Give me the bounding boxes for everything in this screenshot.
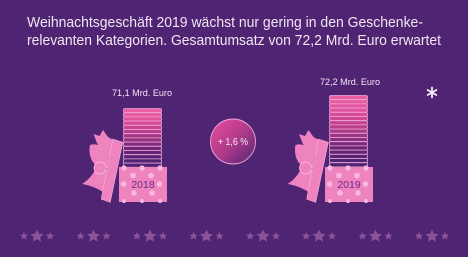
row of stars (20, 230, 449, 242)
year 2018: 2018 (131, 179, 155, 191)
bow and lid 2019 (288, 130, 328, 202)
label: 72,2 Mrd. Euro: 72,2 Mrd. Euro (320, 77, 380, 87)
gift 2018 (82, 108, 167, 203)
stack of coins 2018 (124, 108, 162, 167)
title: relevanten Kategorien. Gesamtumsatz von 72,2 Mrd. Euro erwartet (27, 33, 441, 49)
gift 2019 (288, 96, 373, 203)
year 2019: 2019 (337, 179, 361, 191)
gift box 2018 (119, 165, 167, 203)
gift box 2019 (325, 165, 373, 203)
bow and lid 2018 (82, 130, 123, 202)
asterisk (428, 88, 436, 98)
growth badge (210, 119, 256, 164)
growth value: + 1,6 % (218, 137, 248, 148)
title: Weihnachtsgeschäft 2019 wächst nur gering in den Geschenke- (27, 15, 423, 31)
stack of coins 2019 (330, 96, 368, 167)
label: 71,1 Mrd. Euro: 71,1 Mrd. Euro (112, 88, 172, 98)
